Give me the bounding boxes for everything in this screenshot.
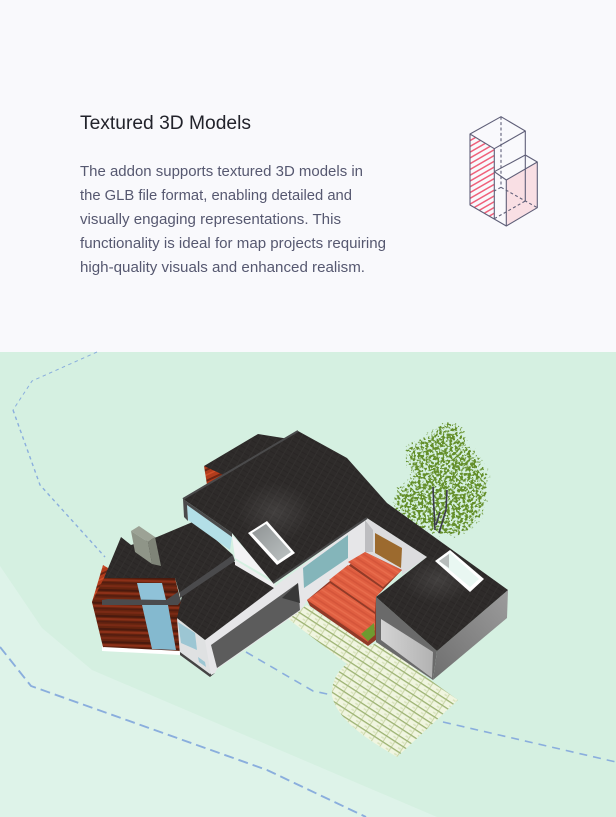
- white gable: [232, 535, 273, 580]
- roof edge: [183, 431, 367, 583]
- small window: [178, 622, 197, 650]
- panel: description: [80, 113, 386, 276]
- window: [303, 535, 348, 588]
- body text: [80, 163, 386, 276]
- brick front: [92, 578, 181, 651]
- front roof: [177, 561, 274, 640]
- deck: [307, 552, 402, 646]
- heading: Textured 3D Models: [80, 113, 251, 134]
- white gable strip: [235, 560, 275, 588]
- grass: [361, 623, 375, 641]
- upper left roof: [104, 521, 233, 595]
- gutter: [180, 555, 235, 598]
- white side wall: [177, 618, 215, 677]
- slab: [102, 592, 181, 605]
- body text: visually engaging representations. This: [80, 211, 341, 228]
- brick block: [92, 565, 181, 655]
- garage: [376, 590, 508, 680]
- upper glass: [187, 505, 232, 550]
- door: [375, 533, 402, 568]
- house: [92, 431, 508, 680]
- body text: high-quality visuals and enhanced realism.: [80, 259, 365, 276]
- dashed route: thick: [0, 647, 366, 817]
- roof sheen: [237, 482, 313, 542]
- small window strip: [198, 657, 206, 667]
- glass upper: [137, 583, 166, 600]
- right skylight: [435, 550, 484, 592]
- deck steps: [348, 552, 402, 587]
- glass lower: [142, 605, 176, 650]
- tree: [390, 414, 494, 540]
- garage side: [433, 590, 508, 680]
- door jamb: [365, 520, 373, 552]
- white front wall: [205, 518, 367, 675]
- body text: The addon supports textured 3D models in: [80, 163, 363, 180]
- glass frame: [183, 499, 232, 537]
- dashed route: thin upper: [13, 352, 97, 410]
- deck base: [307, 552, 402, 646]
- chimney: [131, 526, 161, 566]
- foliage: [390, 414, 494, 540]
- page background: [0, 0, 616, 352]
- base edge: [102, 646, 181, 655]
- main skylight: [248, 521, 295, 565]
- map base: [0, 352, 616, 817]
- icon: isometric building: [470, 117, 537, 226]
- garage light wall: [381, 619, 433, 678]
- garage opening: [211, 583, 300, 668]
- dashed route: middle: [246, 652, 616, 762]
- main roof: [183, 431, 508, 651]
- back roof and brick: [204, 466, 230, 485]
- body text: the GLB file format, enabling detailed and: [80, 187, 352, 204]
- door recess wall: [365, 518, 427, 575]
- garage opening shade: [282, 583, 300, 603]
- trunks: [433, 487, 447, 533]
- paved path: [287, 605, 458, 757]
- lighter map zone: [0, 566, 437, 817]
- garage shaded face: [376, 597, 437, 680]
- body text: functionality is ideal for map projects requiring: [80, 235, 386, 252]
- brick side: [92, 565, 108, 648]
- garage roof sheen: [402, 556, 474, 604]
- dashed route: thin lower: [13, 410, 105, 557]
- wall base: [180, 652, 215, 677]
- panel: map with 3D house: [0, 352, 616, 817]
